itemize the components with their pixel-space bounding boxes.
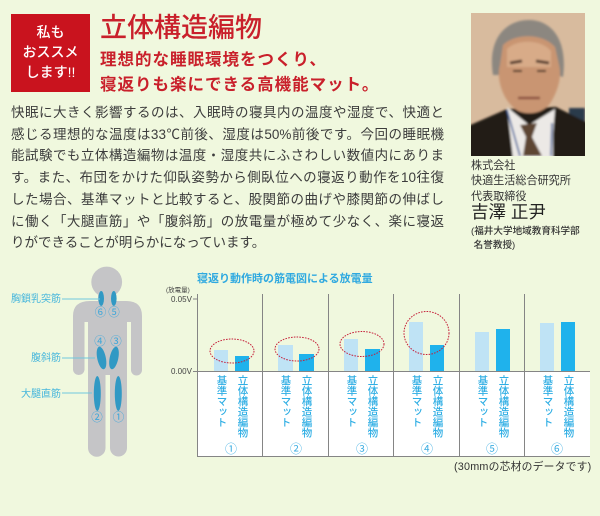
axis labels [166, 285, 193, 376]
axes and dividers [193, 294, 590, 456]
group numbers: ② [290, 442, 302, 456]
chart title: 寝返り動作時の筋電図による放電量 [197, 273, 373, 285]
muscle labels: 大腿直筋 [21, 387, 61, 400]
vertical bar labels: 立体構造編物 [562, 375, 574, 438]
body text: 感じる理想的な温度は33℃前後、湿度は50%前後です。今回の睡眠機 [11, 127, 444, 142]
caption: name: 吉澤 正尹 [471, 202, 546, 222]
muscle numbers: ② [91, 411, 103, 424]
vertical bar labels: 立体構造編物 [236, 375, 248, 438]
vertical bar labels: 立体構造編物 [432, 375, 444, 438]
body text: 快眠に大きく影響するのは、入眠時の寝具内の温度や湿度で、快適と [11, 105, 444, 120]
group numbers: ⑥ [551, 442, 563, 456]
caption: title: 名誉教授) [474, 240, 515, 250]
muscle numbers: ① [113, 411, 125, 424]
muscle numbers: ③ [110, 335, 122, 348]
subtitle: 寝返りも楽にできる高機能マット。 [100, 76, 379, 94]
red dashed highlights [210, 312, 449, 363]
vertical bar labels: 基準マット [410, 375, 422, 428]
vertical bar labels: 基準マット [542, 375, 554, 428]
axis labels: 0.00V [171, 367, 193, 376]
vertical bar labels: 立体構造編物 [498, 375, 510, 438]
body diagram [11, 266, 142, 457]
muscle labels: 胸鎖乳突筋 [11, 292, 61, 305]
body text: りができることが明らかになっています。 [11, 235, 265, 250]
vertical bar labels: 基準マット [476, 375, 488, 428]
bar chart [166, 285, 590, 457]
body text: に働く「大腿直筋」や「腹斜筋」の放電量が極めて少なく、楽に寝返 [11, 214, 444, 228]
badge: recommendation [11, 14, 90, 92]
silhouette [73, 267, 142, 457]
caption: affiliation: 代表取締役 [471, 191, 526, 203]
muscle numbers [91, 306, 125, 424]
axis labels: 0.05V [171, 295, 193, 304]
muscle numbers: ⑤ [108, 306, 120, 319]
body text: 能試験でも立体構造編物は温度・湿度共にふさわしい数値内にありま [11, 148, 444, 163]
vertical bar labels: 基準マット [346, 375, 358, 428]
group numbers: ③ [356, 442, 368, 456]
caption: affiliation [471, 159, 571, 203]
axis labels: (放電量) [166, 285, 190, 294]
group numbers: ④ [421, 442, 433, 456]
vertical bar labels [216, 375, 574, 438]
badge: recommendation: します!! [26, 64, 75, 80]
badge: recommendation: おススメ [22, 44, 78, 60]
muscle labels [11, 292, 61, 400]
vertical bar labels: 立体構造編物 [366, 375, 378, 438]
group numbers [225, 442, 563, 456]
vertical bar labels: 基準マット [216, 375, 228, 428]
caption: title: (福井大学地域教育科学部 [471, 226, 580, 237]
caption: title [471, 226, 580, 250]
group numbers: ⑤ [486, 442, 498, 456]
group numbers: ① [225, 442, 237, 456]
body text [11, 105, 444, 250]
muscle numbers: ⑥ [95, 306, 107, 319]
caption: affiliation: 快適生活総合研究所 [471, 175, 571, 187]
body text: した場合、基準マットと比較すると、股関節の曲げや膝関節の伸ばし [11, 192, 444, 207]
bars: base mat [214, 322, 554, 371]
caption: affiliation: 株式会社 [471, 160, 515, 172]
white lower area [197, 371, 590, 456]
bars: 3D knit [235, 322, 575, 371]
title: 立体構造編物 [100, 13, 262, 43]
muscle labels: 腹斜筋 [31, 351, 61, 364]
subtitle: 理想的な睡眠環境をつくり、 [100, 51, 327, 69]
data note: (30mmの芯材のデータです) [454, 461, 591, 473]
badge: recommendation: 私も [36, 24, 64, 40]
body text: す。また、布団をかけた仰臥姿勢から側臥位への寝返り動作を10往復 [11, 170, 444, 185]
vertical bar labels: 基準マット [280, 375, 292, 428]
muscle label lines [62, 299, 100, 393]
muscle numbers: ④ [94, 335, 106, 348]
subtitle [100, 50, 379, 94]
portrait photo [471, 13, 585, 156]
muscles [94, 291, 122, 411]
vertical bar labels: 立体構造編物 [300, 375, 312, 438]
